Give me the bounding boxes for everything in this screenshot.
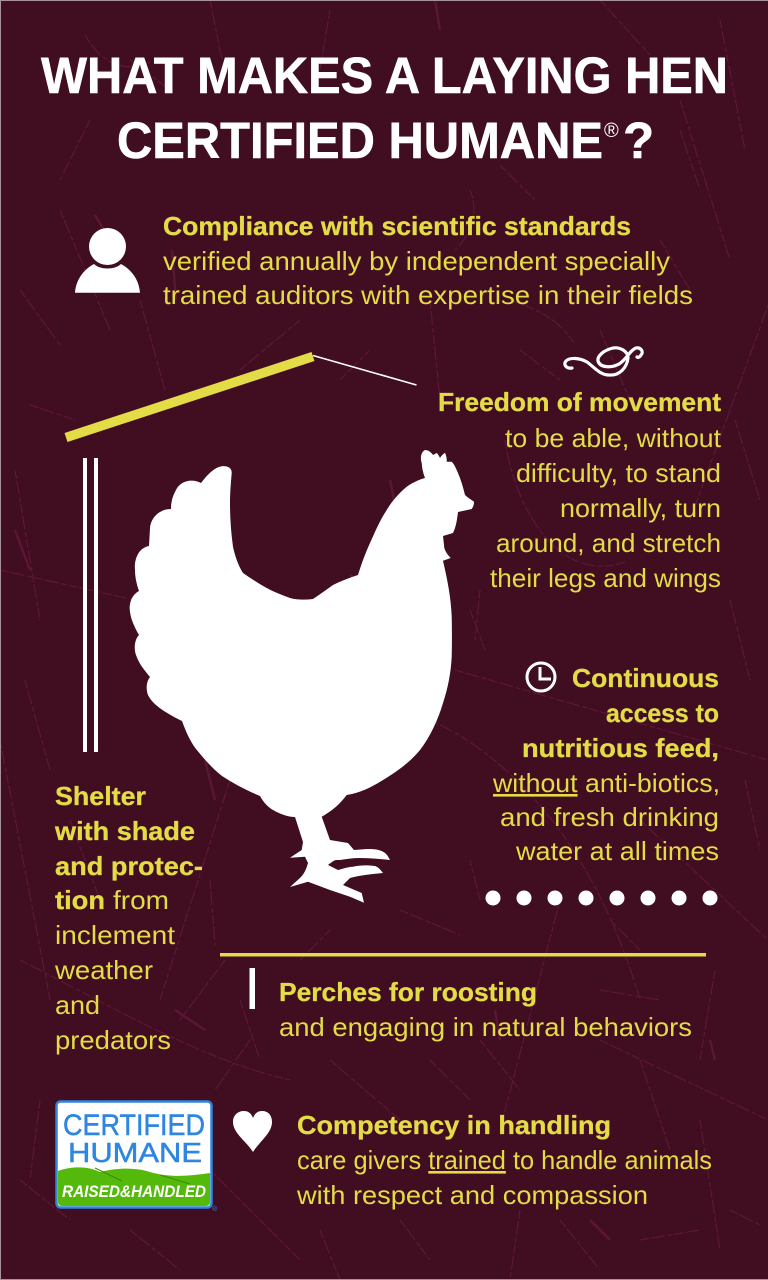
logo: certified humane: CERTIFIED [63,1109,205,1142]
text block: freedom of movement [438,387,722,593]
text block: compliance: verified annually by independent specially [163,246,670,276]
text block: continuous access [492,663,720,866]
title: CERTIFIED HUMANE [117,112,603,169]
text block: continuous access: Continuous [572,663,719,693]
icon: perch line [220,953,706,956]
text block: shelter: inclement [55,920,176,950]
text block: compliance [163,211,693,310]
text block: shelter: with shade [54,816,195,846]
text block: freedom of movement: around, and stretch [496,528,721,558]
text block: shelter: and [55,990,100,1020]
icon: clock [527,663,555,691]
text block: freedom of movement: to be able, without [505,423,722,453]
icon: shelter posts [83,458,98,752]
text block: competency: care givers trained to handle animals [297,1145,712,1175]
text block: perches [279,977,692,1042]
text block: freedom of movement: Freedom of movement [438,387,721,417]
text block: freedom of movement: normally, turn [560,493,721,523]
icon: heart [233,1111,272,1152]
logo: certified humane: HUMANE [68,1137,202,1168]
text block: shelter: Shelter [55,781,146,811]
title: WHAT MAKES A LAYING HEN [41,47,728,104]
logo: certified humane: ® [212,1205,218,1213]
icon: shelter roof [66,356,416,438]
title [41,47,728,169]
text block: perches: Perches for roosting [279,977,537,1007]
text block: shelter: tion [55,885,105,915]
icon: person [75,228,140,293]
dotted row [486,890,718,906]
title: ® [604,120,619,142]
icon: swirl [565,348,642,375]
icon: perch post [250,968,255,1009]
text block: perches: and engaging in natural behaviors [279,1012,692,1042]
text block: shelter: weather [54,955,153,985]
logo: certified humane: RAISED&HANDLED [62,1182,206,1201]
text block: competency [296,1110,712,1210]
text block: shelter [54,781,203,1055]
logo: certified humane [56,1102,218,1213]
text block: shelter: predators [55,1025,171,1055]
text block: freedom of movement: their legs and wings [490,563,721,593]
text block: competency: Competency in handling [297,1110,611,1140]
illustration: hen silhouette [130,450,474,903]
text block: freedom of movement: difficulty, to stand [516,458,721,488]
text block: continuous access: and fresh drinking [500,802,719,832]
text block: compliance: Compliance with scientific standards [163,211,631,241]
text block: compliance: trained auditors with expertise in their fields [163,280,693,310]
title: ? [623,112,654,169]
text block: continuous access: access to [606,698,719,728]
text block: shelter: from [113,885,169,915]
text block: shelter: and protec- [55,851,203,881]
text block: competency: with respect and compassion [296,1180,648,1210]
text block: continuous access: without anti-biotics, [492,768,720,798]
text block: continuous access: water at all times [515,836,719,866]
text block: continuous access: nutritious feed, [522,733,719,763]
